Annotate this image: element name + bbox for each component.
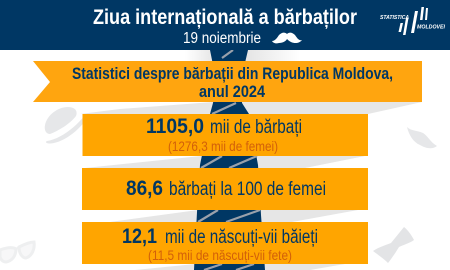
logo: Statistica Moldovei: MOLDOVEI <box>417 24 446 30</box>
logo: Statistica Moldovei: STATISTICA <box>380 15 409 21</box>
necktie <box>194 50 265 270</box>
icon: moustache <box>407 127 437 148</box>
date: 19 noiembrie <box>183 30 261 47</box>
panel: men count: mii de bărbați <box>210 117 302 138</box>
panel: men count: 1105,0 <box>146 114 204 138</box>
panel: births: (11,5 mii de născuți-vii fete) <box>148 247 292 263</box>
ribbon heading <box>72 64 393 101</box>
panel: births <box>82 222 368 264</box>
panel: ratio <box>82 168 368 210</box>
panel: births: 12,1 <box>122 224 157 248</box>
panel: births: mii de născuți-vii băieți <box>165 227 318 248</box>
icon: glasses <box>0 242 34 262</box>
ribbon heading: anul 2024 <box>199 82 265 101</box>
logo: Statistica Moldovei <box>380 7 446 35</box>
header band <box>0 0 450 50</box>
tie shadow wedges <box>80 50 422 270</box>
panel: ratio: 86,6 <box>126 176 163 200</box>
ribbon banner <box>33 61 422 102</box>
panel: men count: (1276,3 mii de femei) <box>168 138 278 154</box>
panel: men count <box>82 114 368 156</box>
icon: bow tie <box>373 227 414 263</box>
panel: ratio: bărbați la 100 de femei <box>169 179 326 200</box>
title: Ziua internațională a bărbaților <box>93 5 358 29</box>
icon: hat <box>45 107 88 144</box>
icon: moustache header <box>272 33 302 43</box>
